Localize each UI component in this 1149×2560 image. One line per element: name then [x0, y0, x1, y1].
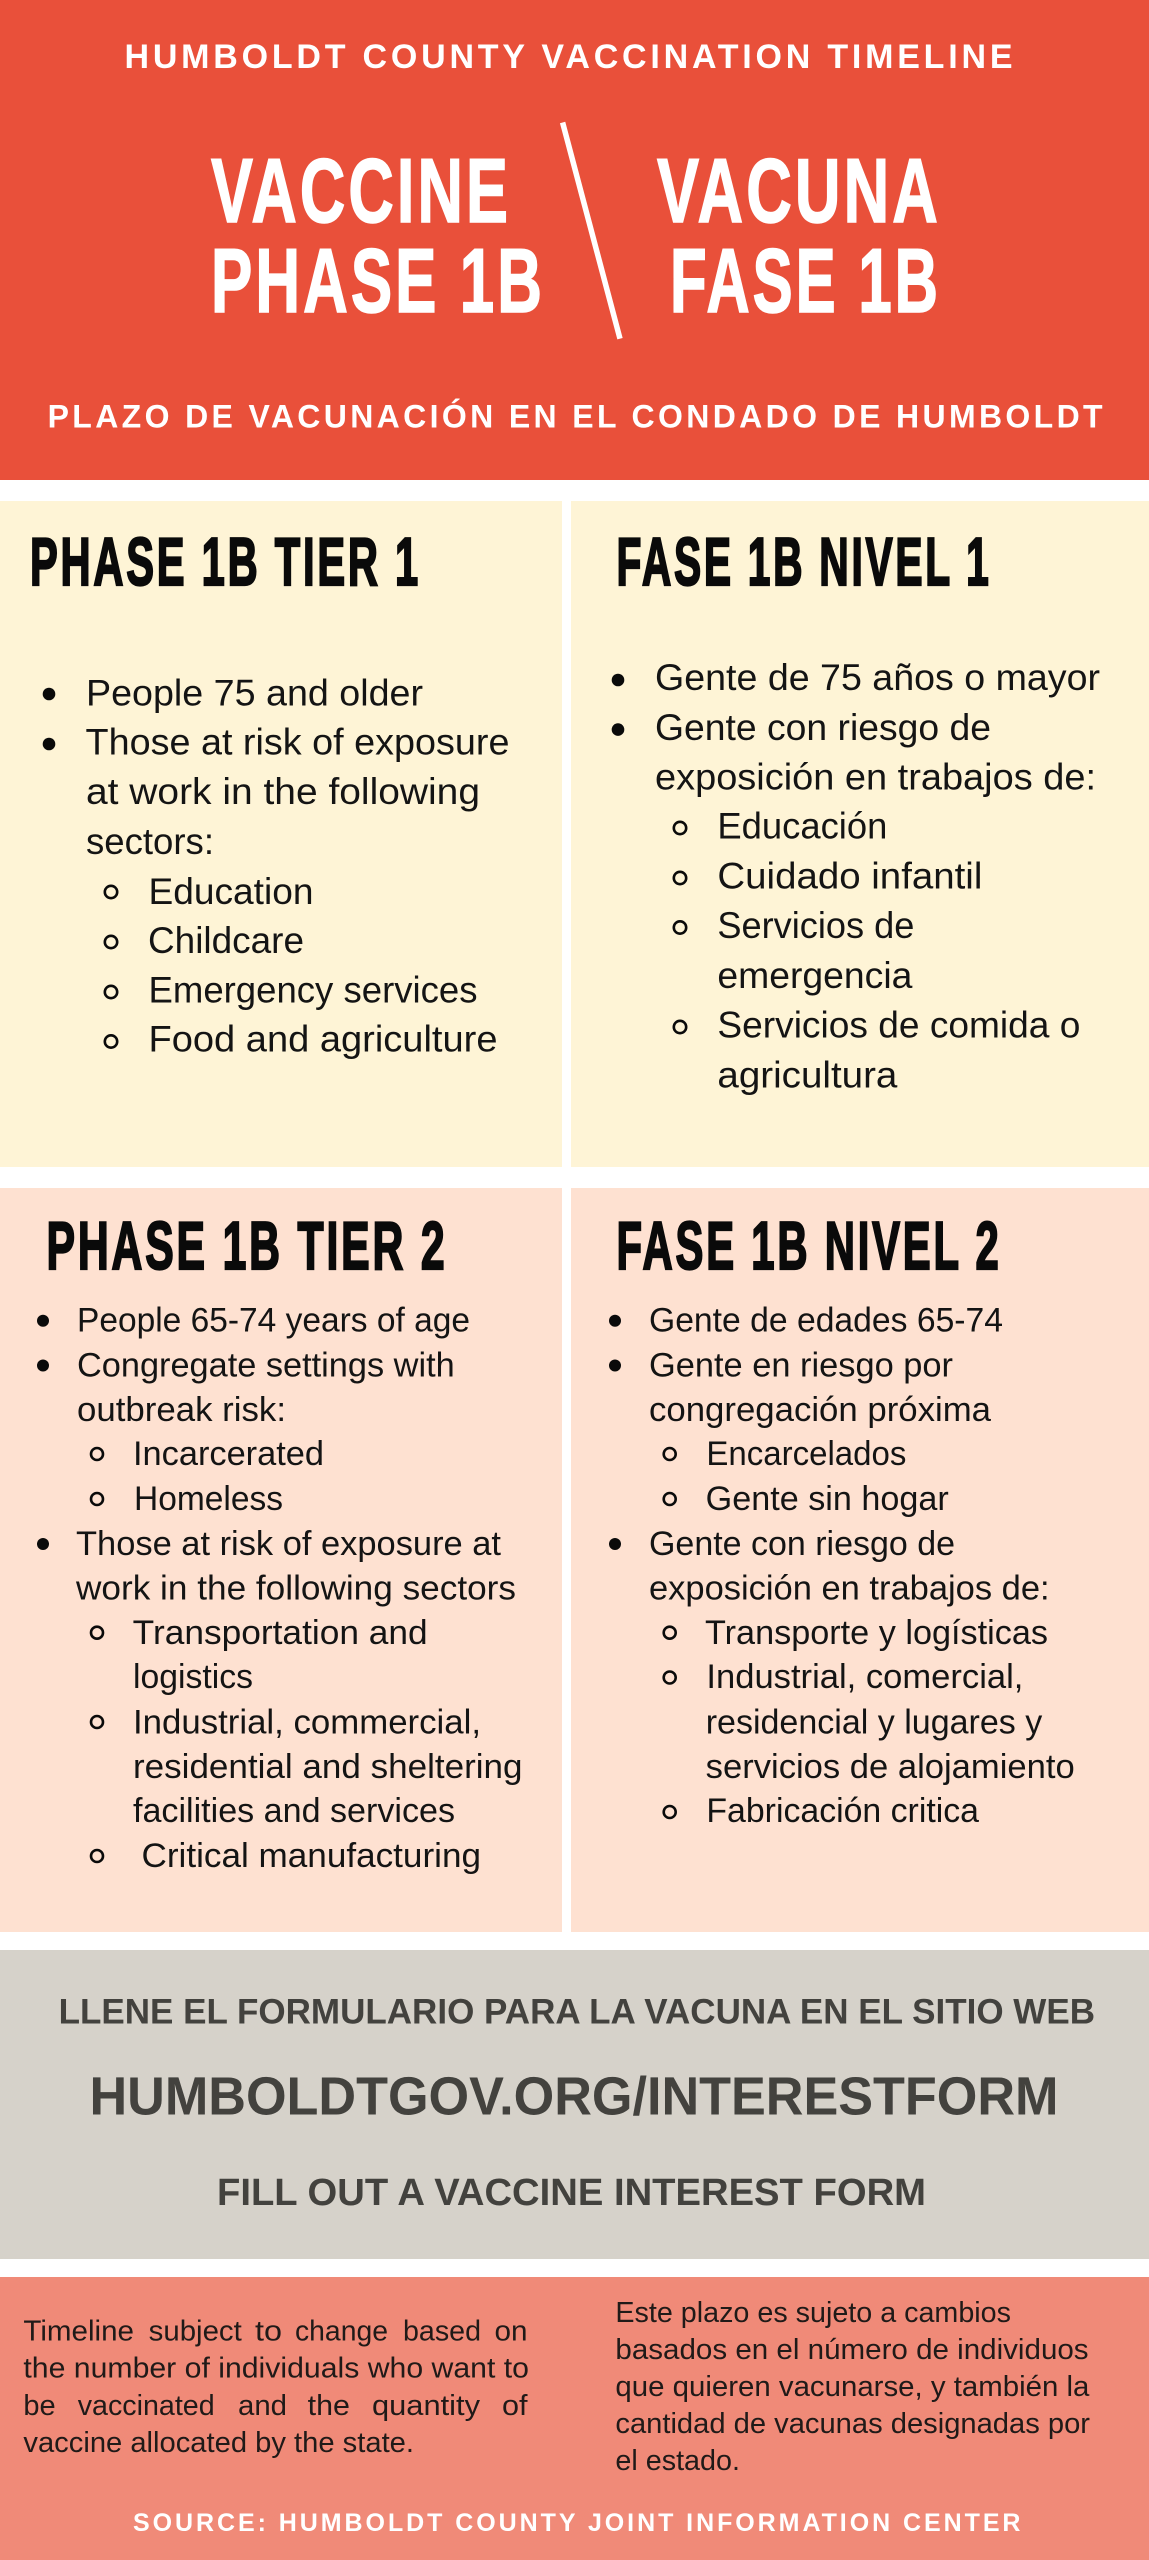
list: tier 1 groups: sectors: [86, 821, 214, 862]
list: nivel 1 groups: Servicios de [717, 905, 914, 946]
list: nivel 2 groups: Transporte y logísticas [705, 1614, 1048, 1652]
text: English disclaimer: vaccine allocated by the state. [23, 2427, 414, 2459]
list: nivel 1 groups: Servicios de comida o [717, 1005, 1080, 1046]
divider: diagonal slash [563, 122, 620, 339]
panel: interest form call to action [0, 1950, 1149, 2259]
text: English disclaimer: Timeline [23, 2316, 134, 2348]
text: English disclaimer: based [403, 2316, 481, 2348]
text: form web address: HUMBOLDTGOV.ORG/INTERESTFORM [90, 2067, 1058, 2127]
text: English disclaimer: quantity [372, 2390, 481, 2422]
list: tier 2 groups: Industrial, commercial, [133, 1704, 481, 1742]
list: nivel 2 groups: Encarcelados [706, 1435, 906, 1473]
text: Spanish disclaimer: basados en el número de individuos [615, 2334, 1089, 2366]
title: vaccine phase 1B: VACCINE [211, 141, 511, 242]
text: English disclaimer: change [295, 2316, 388, 2348]
title: vaccine phase 1B [211, 141, 545, 332]
text: source credit: SOURCE: HUMBOLDT COUNTY JOINT INFORMATION CENTER [133, 2509, 1020, 2537]
list: nivel 1 groups: emergencia [717, 955, 913, 996]
text: Spanish form instruction: LLENE EL FORMULARIO PARA LA VACUNA EN EL SITIO WEB [59, 1992, 1095, 2031]
list: tier 2 groups: Incarcerated [133, 1435, 324, 1473]
list: tier 1 groups [43, 672, 509, 1060]
list: tier 1 groups: Education [148, 871, 314, 912]
panel: fase 1B nivel 1 [571, 501, 1149, 1167]
title: vacuna fase 1B [657, 141, 941, 332]
list: tier 2 groups: People 65-74 years of age [77, 1302, 470, 1340]
text: English disclaimer: vaccinated [78, 2390, 215, 2422]
list: nivel 2 groups: Gente de edades 65-74 [649, 1302, 1003, 1340]
list: tier 2 groups: work in the following sectors [75, 1570, 516, 1608]
list: tier 2 groups: Congregate settings with [77, 1346, 455, 1384]
list: tier 2 groups: Homeless [134, 1480, 283, 1518]
list: tier 2 groups: Those at risk of exposure at [76, 1525, 502, 1563]
text: Spanish disclaimer: el estado. [615, 2445, 740, 2477]
text: English disclaimer: of [502, 2390, 528, 2422]
list: nivel 2 groups [609, 1302, 1075, 1830]
list: nivel 1 groups [612, 657, 1100, 1095]
text: Spanish disclaimer [615, 2297, 1090, 2477]
list: nivel 1 groups: Gente con riesgo de [655, 707, 991, 748]
text: English form instruction: FILL OUT A VACCINE INTEREST FORM [217, 2172, 926, 2214]
text: Spanish disclaimer: que quieren vacunarse, y también la [615, 2371, 1090, 2403]
title: vacuna fase 1B: VACUNA [657, 141, 941, 242]
panel: disclaimer and source [0, 2277, 1149, 2560]
list: tier 1 groups: Those at risk of exposure [86, 722, 510, 762]
list: tier 1 groups: People 75 and older [86, 672, 423, 714]
list: nivel 2 groups: Gente con riesgo de [649, 1525, 955, 1563]
panel: phase 1B tier 2 [0, 1188, 562, 1932]
list: tier 1 groups: Childcare [148, 920, 304, 961]
text: English disclaimer [23, 2316, 529, 2459]
list: nivel 1 groups: agricultura [717, 1054, 898, 1095]
list: nivel 2 groups: Gente en riesgo por [649, 1346, 953, 1384]
list: tier 1 groups: Emergency services [148, 970, 478, 1010]
heading: English timeline title: HUMBOLDT COUNTY VACCINATION TIMELINE [124, 38, 1012, 76]
text: English disclaimer: subject [149, 2316, 242, 2348]
list: tier 1 groups: at work in the following [86, 771, 480, 812]
text: English disclaimer: to [255, 2316, 282, 2348]
list: nivel 2 groups: Fabricación critica [706, 1792, 979, 1830]
list: nivel 2 groups: servicios de alojamiento [706, 1748, 1075, 1786]
text: Spanish disclaimer: cantidad de vacunas designadas por [615, 2408, 1090, 2440]
list: tier 2 groups: logistics [133, 1658, 253, 1696]
list: tier 2 groups: outbreak risk: [77, 1391, 286, 1429]
text: English disclaimer: and [238, 2390, 287, 2422]
text: Spanish disclaimer: Este plazo es sujeto a cambios [615, 2297, 1011, 2329]
list: nivel 1 groups: Educación [717, 806, 887, 847]
title: vacuna fase 1B: FASE 1B [670, 231, 941, 332]
list: tier 2 groups [37, 1302, 522, 1875]
heading: phase 1B tier 1: PHASE 1B TIER 1 [30, 524, 421, 600]
list: nivel 2 groups: exposición en trabajos de: [649, 1570, 1050, 1608]
list: nivel 2 groups: Industrial, comercial, [706, 1658, 1023, 1696]
text: English disclaimer: the number of individuals who want to [23, 2353, 529, 2385]
list: nivel 2 groups: congregación próxima [649, 1391, 991, 1429]
list: tier 2 groups: residential and sheltering [133, 1748, 522, 1786]
list: tier 2 groups: Critical manufacturing [142, 1837, 481, 1875]
list: tier 1 groups: Food and agriculture [148, 1018, 498, 1060]
list: tier 2 groups: Transportation and [133, 1614, 428, 1652]
list: nivel 1 groups: exposición en trabajos de: [655, 757, 1096, 798]
list: nivel 2 groups: residencial y lugares y [706, 1704, 1042, 1742]
heading: Spanish timeline title: PLAZO DE VACUNACIÓN EN EL CONDADO DE HUMBOLDT [48, 398, 1103, 434]
text: English disclaimer: the [308, 2390, 350, 2422]
title: vaccine phase 1B: PHASE 1B [211, 231, 545, 332]
list: nivel 1 groups: Cuidado infantil [717, 855, 982, 896]
list: nivel 2 groups: Gente sin hogar [706, 1480, 949, 1518]
list: nivel 1 groups: Gente de 75 años o mayor [655, 657, 1100, 698]
panel: fase 1B nivel 2 [571, 1188, 1149, 1932]
panel: phase 1B tier 1 [0, 501, 562, 1167]
heading: phase 1B tier 2: PHASE 1B TIER 2 [46, 1208, 448, 1284]
text: English disclaimer: be [23, 2390, 56, 2422]
text: English disclaimer: on [494, 2316, 528, 2348]
list: tier 2 groups: facilities and services [133, 1792, 455, 1830]
panel: header [0, 0, 1149, 480]
